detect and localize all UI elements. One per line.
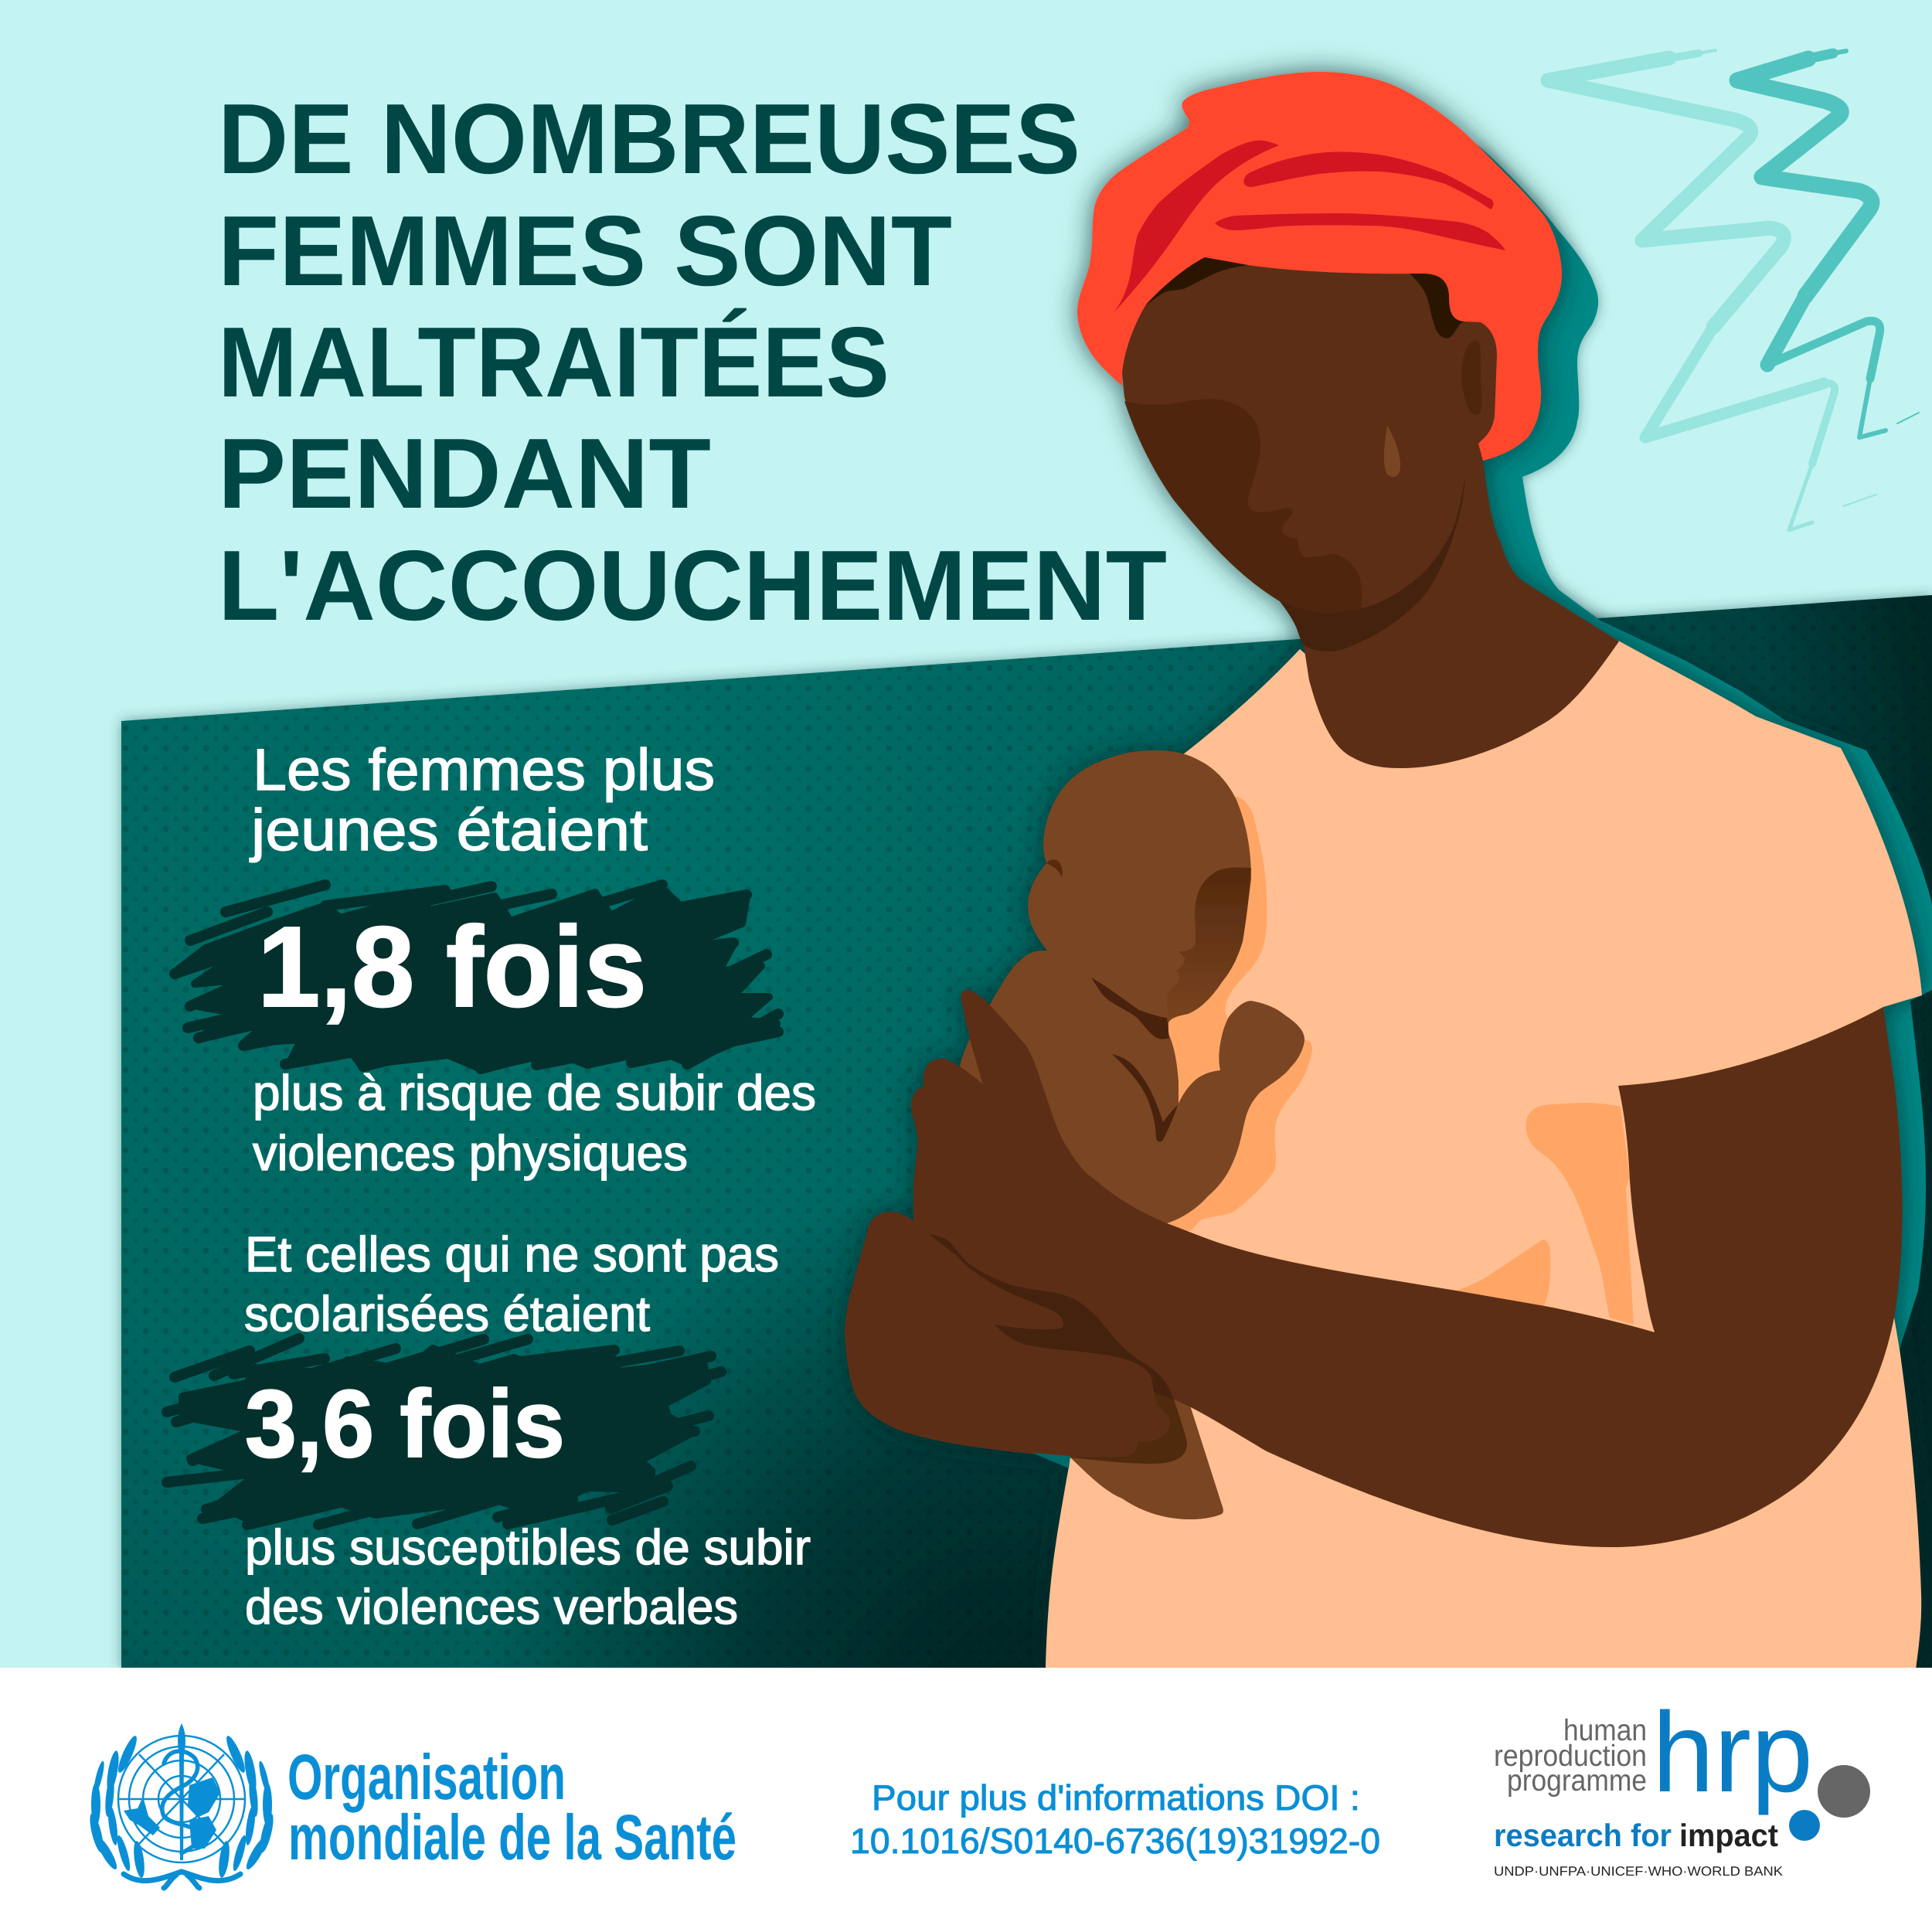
illustration: mother holding baby — [845, 72, 1922, 1669]
turban stripe lower — [1215, 213, 1505, 250]
ribbon — [124, 1872, 240, 1888]
text: verbal violence risk: plus susceptibles de subir — [245, 1519, 811, 1575]
laurel wreath right — [217, 1734, 276, 1879]
text: verbal violence risk — [245, 1519, 811, 1634]
shirt fold: lower — [1456, 1240, 1550, 1306]
globe grid — [118, 1736, 245, 1862]
turban stripe left — [1114, 141, 1279, 312]
turban — [1077, 72, 1562, 461]
white footer — [0, 1668, 1932, 1932]
baby neck crease — [1091, 978, 1169, 1039]
baby body — [960, 750, 1304, 1223]
text: women not in school — [244, 1226, 779, 1342]
laurel wreath left — [87, 1734, 146, 1879]
intro text: younger women — [250, 737, 715, 863]
mother arm and hands — [845, 990, 1903, 1547]
blue dot — [1789, 1810, 1820, 1841]
title: L'ACCOUCHEMENT — [218, 530, 1167, 641]
title — [218, 83, 1167, 641]
logo: human reproduction programme — [1494, 1689, 1870, 1879]
brush scribble behind 1,8 fois — [175, 885, 778, 1069]
logo: World Health Organization emblem — [87, 1723, 276, 1888]
logo text: Organisation mondiale de la Santé — [287, 1741, 736, 1873]
teal offset silhouette behind the figure — [1468, 145, 1932, 1349]
brush scribble behind 3,6 fois — [167, 1338, 721, 1525]
statistic: 3,6 fois: 3,6 fois — [245, 1371, 565, 1478]
face shade — [1124, 399, 1362, 613]
title: DE NOMBREUSES — [218, 83, 1080, 195]
DOI reference: Pour plus d'informations DOI : — [872, 1777, 1360, 1818]
shirt fold: armpit — [1526, 1103, 1634, 1325]
globe land masses — [124, 1797, 160, 1835]
title: FEMMES SONT — [218, 196, 952, 307]
text: physical violence risk: plus à risque de subir des — [253, 1065, 816, 1121]
decorative zigzag brush strokes — [1548, 50, 1919, 530]
title: PENDANT — [218, 418, 711, 529]
logo: human reproduction programme: impact — [1679, 1818, 1778, 1853]
icon: tear drop — [1384, 425, 1400, 477]
programme name: human — [1563, 1714, 1647, 1747]
logo text: Organisation mondiale de la Santé: Organisation — [287, 1741, 566, 1813]
intro text: younger women: Les femmes plus — [253, 737, 715, 803]
small teal sliver under the hand — [1032, 1453, 1070, 1468]
text: women not in school: scolarisées étaient — [244, 1286, 650, 1342]
overlapping thumb shade — [1070, 1393, 1187, 1464]
title: MALTRAITÉES — [218, 307, 889, 418]
chin shadow — [1280, 476, 1465, 651]
baby arm crease — [1112, 1054, 1178, 1141]
partner organisations: UNDP·UNFPA·UNICEF·WHO·WORLD BANK — [1494, 1864, 1784, 1879]
turban stripe middle — [1243, 152, 1494, 209]
serpent — [162, 1751, 200, 1853]
grey dot — [1818, 1765, 1870, 1818]
hair at right temple — [1410, 274, 1464, 338]
text: physical violence risk — [253, 1065, 816, 1181]
DOI reference: 10.1016/S0140-6736(19)31992-0 — [850, 1821, 1380, 1861]
logo text: Organisation mondiale de la Santé: mondiale de la Santé — [288, 1801, 736, 1873]
programme name: programme — [1507, 1764, 1647, 1798]
text: physical violence risk: violences physiques — [253, 1125, 688, 1181]
shirt shade behind baby — [1121, 796, 1312, 1231]
hand shadow — [929, 1234, 1174, 1400]
text: women not in school: Et celles qui ne sont pas — [245, 1226, 779, 1282]
statistic: 1,8 fois: 1,8 fois — [257, 903, 647, 1031]
text: verbal violence risk: des violences verbales — [245, 1579, 738, 1634]
ear inner shade — [1461, 340, 1481, 415]
neck and face — [1122, 257, 1619, 768]
research for impact: research for — [1494, 1818, 1672, 1853]
programme name: reproduction — [1494, 1740, 1647, 1773]
programme name — [1494, 1714, 1647, 1798]
shirt — [1046, 641, 1922, 1669]
intro text: younger women: jeunes étaient — [250, 798, 648, 863]
DOI reference — [850, 1777, 1380, 1861]
baby face shadow — [1167, 867, 1251, 1022]
staff — [178, 1723, 185, 1860]
hrp letters: hrp — [1652, 1689, 1813, 1816]
teal statistics panel — [121, 595, 1932, 1669]
baby ear — [1046, 859, 1063, 877]
baby leg below the hand — [1070, 1391, 1223, 1519]
hair at left temple — [1146, 257, 1248, 304]
